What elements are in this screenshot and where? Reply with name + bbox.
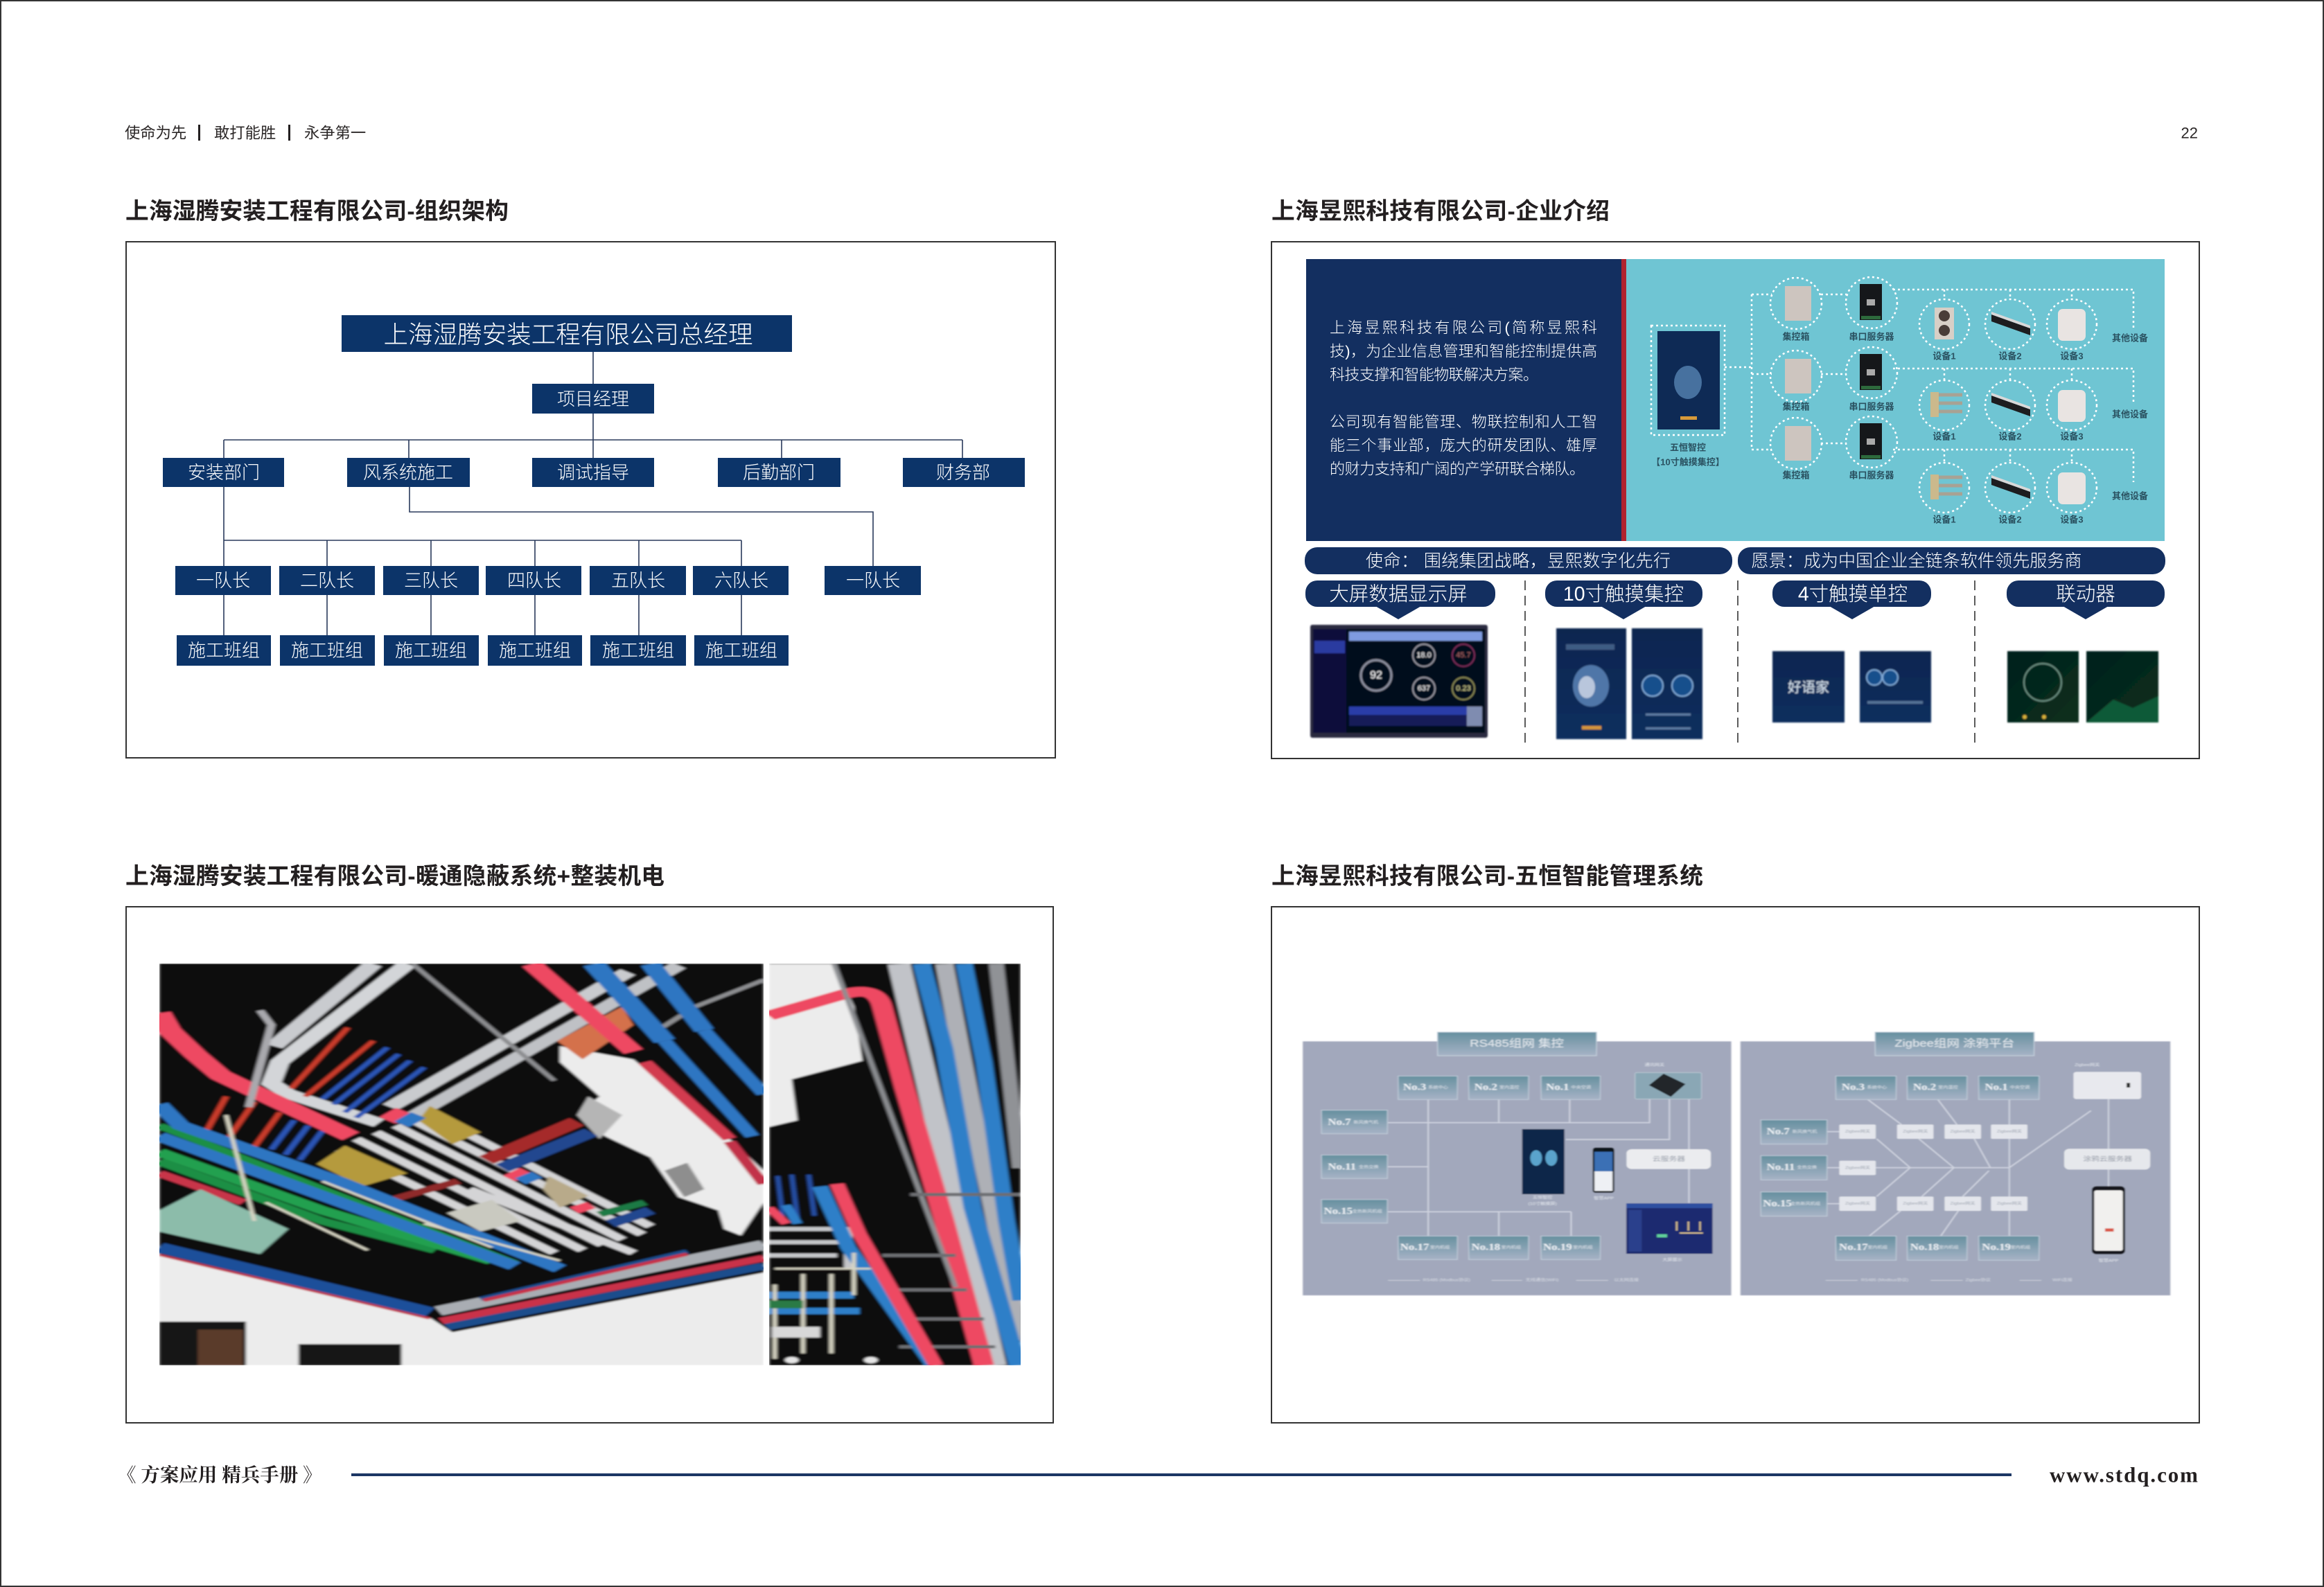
label: 10 inch touch: 10寸触摸集控 bbox=[1563, 583, 1684, 605]
diagram: Zigbee network: 室内机组 bbox=[1939, 1245, 1959, 1250]
construction crew row: 施工班组 bbox=[395, 640, 467, 661]
diagram: RS485 network: 室内机组 bbox=[1573, 1245, 1593, 1250]
photo: pipe runs close-up bbox=[769, 964, 1021, 1365]
intro text block: 能三个事业部，庞大的研发团队、雄厚 bbox=[1330, 436, 1597, 454]
department row: 风系统施工 bbox=[363, 462, 453, 483]
diagram: Zigbee network: No.17 bbox=[1839, 1242, 1868, 1252]
panel: five-constant management system bbox=[1271, 907, 2199, 1423]
construction crew row: 施工班组 bbox=[499, 640, 571, 661]
label: 10 inch touch bbox=[1545, 580, 1702, 619]
big data screen: 18.0 bbox=[1416, 651, 1432, 659]
diagram: Zigbee network bbox=[1739, 1031, 2172, 1296]
heading: HVAC concealed works: 上海湿腾安装工程有限公司-暖通隐蔽系统+整装机电 bbox=[125, 863, 664, 889]
diagram: Zigbee network: Zigbee网关 bbox=[1997, 1200, 2023, 1206]
diagram: Zigbee network: Zigbee网关 bbox=[1903, 1128, 1928, 1134]
diagram: RS485 network: 云服务器 bbox=[1653, 1155, 1685, 1163]
diagram: Zigbee network: 智慧APP bbox=[2099, 1257, 2118, 1263]
4 inch screens: 好语家 bbox=[1788, 680, 1829, 695]
tray bbox=[159, 1189, 288, 1254]
diagram: RS485 network: No.3 bbox=[1403, 1082, 1427, 1092]
4 inch screens bbox=[1772, 651, 1931, 722]
team leader row: 四队长 bbox=[507, 570, 561, 591]
diagram: RS485 network: 全热交换 bbox=[1359, 1164, 1379, 1169]
big data screen: 45.7 bbox=[1456, 651, 1471, 659]
diagram: Zigbee network: Zigbee组网 涂鸦平台 bbox=[1894, 1038, 2014, 1049]
touch panel node: 五恒智控 bbox=[1670, 442, 1706, 453]
vision pill bbox=[1738, 547, 2165, 574]
header slogan: 永争第一 bbox=[304, 125, 366, 141]
team leader row: 六队长 bbox=[714, 570, 768, 591]
device row 1 bbox=[1919, 299, 2148, 362]
diagram: Zigbee network: WiFi连接 bbox=[2052, 1277, 2072, 1282]
header slogan: 敢打能胜 bbox=[214, 125, 276, 141]
big data screen bbox=[1310, 625, 1488, 738]
team leader row: 一队长 bbox=[846, 570, 900, 591]
diagram: Zigbee network: 涂鸦云服务器 bbox=[2083, 1155, 2132, 1163]
diagram: RS485 network: 系统中心 bbox=[1428, 1084, 1448, 1090]
department row: 调试指导 bbox=[557, 462, 629, 483]
intro text block: 科技支撑和智能物联解决方案。 bbox=[1330, 366, 1538, 384]
diagram: Zigbee network: No.18 bbox=[1910, 1242, 1939, 1252]
diagram: Zigbee network: Zigbee网关 bbox=[1845, 1200, 1871, 1206]
panel: organisation chart bbox=[126, 242, 1055, 758]
diagram: RS485 network: 五恒智控 bbox=[1533, 1195, 1553, 1200]
device row 3 bbox=[1919, 463, 2148, 525]
construction crew row bbox=[177, 635, 789, 666]
page number: 22 bbox=[2181, 125, 2198, 141]
diagram: Zigbee network: 室内温控 bbox=[1938, 1084, 1958, 1090]
diagram: Zigbee network: Zigbee网关 bbox=[2075, 1062, 2100, 1067]
diagram: Zigbee network: RS485 (Modbus协议) bbox=[1861, 1277, 1908, 1282]
vision pill: 愿景：成为中国企业全链条软件领先服务商 bbox=[1752, 551, 2081, 571]
connector lines bbox=[224, 352, 962, 635]
red divider bbox=[1621, 259, 1626, 541]
intro text block: 技)，为企业信息管理和智能控制提供高 bbox=[1330, 342, 1597, 360]
big data screen: 92 bbox=[1370, 669, 1382, 682]
diagram: Zigbee network: No.1 bbox=[1985, 1082, 2008, 1092]
diagram: RS485 network: No.7 bbox=[1328, 1117, 1351, 1127]
construction crew row: 施工班组 bbox=[188, 640, 260, 661]
device row 2 bbox=[1919, 380, 2148, 442]
diagram: Zigbee network: 系统中心 bbox=[1867, 1084, 1887, 1090]
diagram: Zigbee network: Zigbee网关 bbox=[1950, 1200, 1975, 1206]
system topology diagram bbox=[1626, 259, 2165, 541]
diagram: Zigbee network: Zigbee网关 bbox=[1950, 1128, 1975, 1134]
diagram: Zigbee network: 全热新风机组 bbox=[1790, 1200, 1821, 1206]
diagram: Zigbee network: Zigbee网关 bbox=[1997, 1128, 2023, 1134]
control box and serial server row 1: 串口服务器 bbox=[1849, 331, 1894, 342]
diagram: Zigbee network: No.19 bbox=[1982, 1242, 2011, 1252]
diagram: Zigbee network: No.7 bbox=[1767, 1126, 1790, 1137]
heading: organisation structure: 上海湿腾安装工程有限公司-组织架构 bbox=[125, 198, 509, 224]
device row 1: 设备3 bbox=[2060, 351, 2084, 362]
gold boxes bbox=[419, 1106, 481, 1144]
diagram: Zigbee network: 中央空调 bbox=[2010, 1084, 2030, 1090]
long insulated pipes bbox=[159, 1162, 435, 1250]
team leader row: 五队长 bbox=[611, 570, 665, 591]
intro text block bbox=[1306, 259, 1621, 541]
intro text block: 上海昱熙科技有限公司(简称昱熙科 bbox=[1330, 319, 1597, 337]
diagram: RS485 network: 通讯网关 bbox=[1645, 1062, 1665, 1067]
control box and serial server row 2: 集控箱 bbox=[1782, 402, 1810, 411]
diagram: RS485 network: 室内机组 bbox=[1501, 1245, 1522, 1250]
diagram: RS485 network: (10寸触摸屏) bbox=[1529, 1201, 1557, 1206]
device row 2: 设备1 bbox=[1933, 431, 1956, 442]
photo: ceiling pipe network bbox=[159, 964, 764, 1365]
diagram: RS485 network: 以太网连接 bbox=[1614, 1277, 1639, 1282]
label: 4 inch touch: 4寸触摸单控 bbox=[1798, 583, 1908, 605]
department row bbox=[163, 458, 1025, 487]
diagram: RS485 network: No.15 bbox=[1324, 1206, 1353, 1216]
diagram: RS485 network: No.17 bbox=[1400, 1242, 1429, 1252]
big data screen: 637 bbox=[1418, 684, 1430, 693]
team leader row: 一队长 bbox=[196, 570, 250, 591]
panel: company introduction bbox=[1271, 242, 2199, 759]
team leader row: 三队长 bbox=[404, 570, 458, 591]
department row: 财务部 bbox=[936, 462, 990, 483]
device row 1: 设备2 bbox=[1998, 351, 2022, 362]
diagram: Zigbee network: Zigbee网关 bbox=[1903, 1200, 1928, 1206]
panel: HVAC concealed works photos bbox=[126, 907, 1053, 1423]
diagram: Zigbee network: No.15 bbox=[1763, 1198, 1792, 1209]
team leader row bbox=[175, 566, 921, 595]
device row 2: 设备3 bbox=[2060, 431, 2084, 442]
device row 3: 设备3 bbox=[2060, 514, 2084, 525]
dotted network lines bbox=[1725, 290, 2133, 482]
product column dividers bbox=[1525, 580, 1975, 744]
diagram: Zigbee network: 新风换气机 bbox=[1793, 1128, 1817, 1134]
label: 4 inch touch bbox=[1772, 580, 1931, 619]
construction crew row: 施工班组 bbox=[602, 640, 674, 661]
linkage screens bbox=[2007, 651, 2158, 722]
small manifolds bbox=[204, 1028, 373, 1147]
diagram: RS485 network: No.1 bbox=[1546, 1082, 1569, 1092]
diagram: Zigbee network: 室内机组 bbox=[2011, 1245, 2031, 1250]
general manager box bbox=[342, 315, 792, 352]
footer rule bbox=[351, 1473, 2012, 1476]
diagram: Zigbee network: 室内机组 bbox=[1867, 1245, 1887, 1250]
mission pill bbox=[1305, 547, 1732, 574]
diagram: Zigbee network: Zigbee网关 bbox=[1845, 1128, 1871, 1134]
device row 1: 其他设备 bbox=[2112, 333, 2148, 344]
diagram: Zigbee network: No.3 bbox=[1842, 1082, 1865, 1092]
control box and serial server row 2: 串口服务器 bbox=[1849, 402, 1894, 411]
diagram: RS485 network: 全热新风机组 bbox=[1353, 1208, 1382, 1214]
general manager box: 上海湿腾安装工程有限公司总经理 bbox=[384, 321, 752, 348]
diagram: Zigbee network: Zigbee网关 bbox=[1845, 1164, 1871, 1170]
diagram: RS485 network: 中央空调 bbox=[1571, 1084, 1591, 1090]
control box and serial server row 2 bbox=[1770, 347, 1897, 411]
label: big screen: 大屏数据显示屏 bbox=[1329, 583, 1468, 605]
device row 1: 设备1 bbox=[1933, 351, 1956, 362]
intro text block: 公司现有智能管理、物联控制和人工智 bbox=[1330, 413, 1597, 431]
intro text block: 的财力支持和广阔的产学研联合梯队。 bbox=[1330, 460, 1585, 478]
control box and serial server row 3: 集控箱 bbox=[1782, 470, 1810, 481]
device row 2: 设备2 bbox=[1998, 431, 2022, 442]
diagram: RS485 network: RS485组网 集控 bbox=[1470, 1038, 1564, 1049]
diagram: RS485 network: 新风换气机 bbox=[1353, 1119, 1379, 1125]
device row 3: 设备2 bbox=[1998, 514, 2022, 525]
diagram: RS485 network: 室内机组 bbox=[1430, 1245, 1450, 1250]
diagram: RS485 network: 大屏展示 bbox=[1662, 1257, 1682, 1262]
construction crew row: 施工班组 bbox=[705, 640, 777, 661]
device row 2: 其他设备 bbox=[2112, 409, 2148, 420]
department row: 安装部门 bbox=[188, 462, 260, 483]
control box and serial server row 1 bbox=[1770, 277, 1897, 342]
project manager box: 项目经理 bbox=[557, 389, 629, 409]
mission pill: 使命： 围绕集团战略，昱熙数字化先行 bbox=[1366, 551, 1671, 571]
control box and serial server row 1: 集控箱 bbox=[1782, 331, 1810, 342]
diagram: RS485 network: 室内温控 bbox=[1499, 1084, 1520, 1090]
device row 3: 设备1 bbox=[1933, 514, 1956, 525]
diagram: Zigbee network: No.2 bbox=[1913, 1082, 1936, 1092]
heading: company introduction: 上海昱熙科技有限公司-企业介绍 bbox=[1271, 198, 1610, 224]
control box and serial server row 3: 串口服务器 bbox=[1849, 470, 1894, 481]
diagram: RS485 network: 无线通信(WiFi) bbox=[1526, 1277, 1558, 1282]
label: linkage bbox=[2007, 580, 2165, 619]
footer website: www.stdq.com bbox=[2050, 1463, 2198, 1487]
footer title: 《 方案应用 精兵手册 》 bbox=[117, 1464, 322, 1485]
diagram: RS485 network: No.11 bbox=[1328, 1162, 1356, 1172]
touch panel node: 【10寸触摸集控】 bbox=[1651, 457, 1725, 467]
label: linkage: 联动器 bbox=[2056, 583, 2115, 605]
diagram: RS485 network: No.18 bbox=[1471, 1242, 1501, 1252]
silver mains bbox=[274, 964, 373, 1046]
heading: five-constant management system: 上海昱熙科技有限公司-五恒智能管理系统 bbox=[1271, 863, 1703, 889]
control box and serial server row 3 bbox=[1770, 416, 1897, 481]
diagram: Zigbee network: Zigbee协议 bbox=[1966, 1277, 1991, 1282]
diagram: Zigbee network: 全热交换 bbox=[1797, 1164, 1817, 1170]
team leader row: 二队长 bbox=[300, 570, 354, 591]
construction crew row: 施工班组 bbox=[291, 640, 363, 661]
big data screen: 0.23 bbox=[1456, 684, 1471, 693]
diagram: RS485 network: No.2 bbox=[1474, 1082, 1497, 1092]
department row: 后勤部门 bbox=[743, 462, 815, 483]
header slogan: 使命为先 bbox=[125, 125, 186, 141]
touch panel node bbox=[1651, 326, 1725, 467]
diagram: RS485 network: RS485 (Modbus协议) bbox=[1423, 1277, 1470, 1282]
stripes bbox=[340, 1118, 651, 1253]
header slogan bbox=[125, 125, 366, 141]
project manager box bbox=[532, 384, 654, 414]
10 inch screens bbox=[1556, 628, 1702, 739]
diagram: RS485 network bbox=[1302, 1031, 1732, 1296]
diagram: RS485 network: No.19 bbox=[1543, 1242, 1572, 1252]
white duct bbox=[560, 1046, 764, 1236]
device row 3: 其他设备 bbox=[2112, 490, 2148, 502]
label: big screen bbox=[1305, 580, 1495, 619]
diagram: RS485 network: 智慧APP bbox=[1594, 1195, 1614, 1200]
diagram: Zigbee network: No.11 bbox=[1767, 1162, 1795, 1172]
red main bbox=[159, 1013, 351, 1136]
